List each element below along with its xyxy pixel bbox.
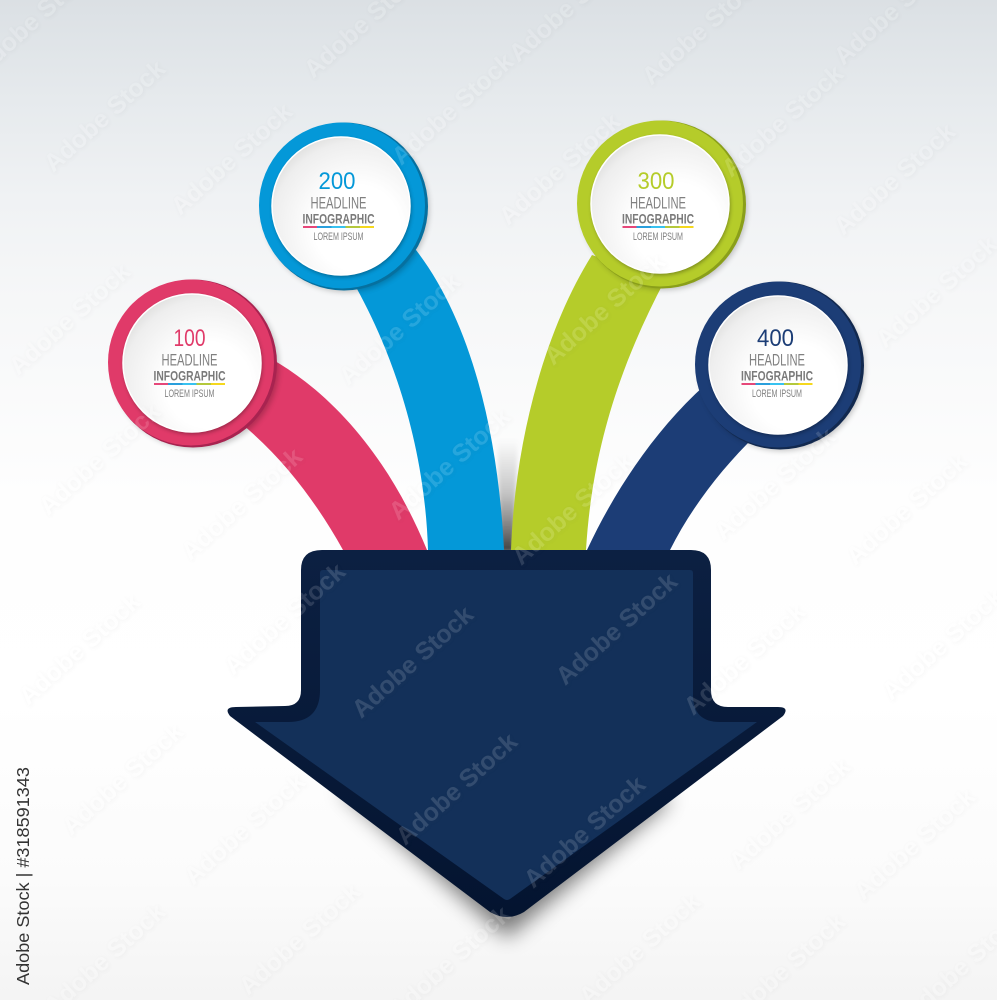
text: lorem ipsum: LOREM IPSUM — [164, 388, 214, 400]
watermarks: Adobe Stock — [551, 567, 683, 691]
watermarks: Adobe Stock — [39, 54, 171, 178]
text: 200: 200 — [318, 168, 356, 195]
watermarks: Adobe Stock — [841, 447, 973, 571]
watermarks: Adobe Stock — [494, 107, 626, 231]
watermarks: Adobe Stock — [4, 257, 136, 381]
watermarks: Adobe Stock — [519, 770, 651, 894]
rainbow rule — [154, 383, 225, 385]
arrow shadow — [340, 770, 672, 938]
text: headline: HEADLINE — [630, 194, 686, 212]
watermarks: Adobe Stock — [724, 752, 856, 876]
text: infographic: INFOGRAPHIC — [154, 368, 226, 384]
circle: navy — [695, 282, 865, 451]
watermarks: Adobe Stock — [717, 59, 849, 183]
text: infographic: INFOGRAPHIC — [741, 368, 813, 384]
watermarks: Adobe Stock — [179, 767, 311, 891]
text: headline: HEADLINE — [310, 194, 366, 212]
shadow between bands — [497, 440, 518, 552]
watermarks: Adobe Stock — [539, 247, 671, 371]
watermarks: Adobe Stock — [219, 557, 351, 681]
watermarks: Adobe Stock — [391, 727, 523, 851]
text: headline: HEADLINE — [749, 350, 805, 370]
text: infographic: INFOGRAPHIC — [302, 210, 374, 226]
watermarks: Adobe Stock — [507, 447, 639, 571]
band: pink — [243, 358, 427, 550]
watermarks: Adobe Stock — [849, 782, 981, 906]
circle: green — [577, 120, 747, 290]
text: infographic: INFOGRAPHIC — [622, 210, 694, 226]
watermarks: Adobe Stock — [34, 397, 166, 521]
circle: pink — [108, 280, 279, 449]
circle: blue — [259, 122, 429, 292]
band: blue — [352, 250, 504, 550]
watermarks: Adobe Stock — [166, 97, 298, 221]
text: headline: HEADLINE — [162, 350, 218, 370]
text: 100: 100 — [174, 325, 206, 352]
watermarks: Adobe Stock — [709, 422, 841, 546]
band: green — [511, 255, 665, 550]
watermarks: Adobe Stock — [829, 117, 961, 241]
text: lorem ipsum: LOREM IPSUM — [633, 231, 683, 243]
text: 400: 400 — [757, 325, 794, 352]
watermarks: Adobe Stock — [387, 47, 519, 171]
watermarks: Adobe Stock — [57, 717, 189, 841]
text: lorem ipsum: LOREM IPSUM — [752, 388, 802, 400]
text: lorem ipsum: LOREM IPSUM — [314, 231, 364, 243]
rainbow rule — [622, 226, 694, 228]
band: navy — [587, 385, 756, 550]
watermarks: Adobe Stock — [679, 597, 811, 721]
stock id caption: Adobe Stock | #318591343 — [13, 767, 33, 985]
rainbow rule — [303, 226, 374, 228]
watermarks: Adobe Stock — [14, 587, 146, 711]
watermarks: Adobe Stock — [384, 402, 516, 526]
rainbow rule — [742, 383, 812, 385]
watermarks: Adobe Stock — [334, 267, 466, 391]
watermarks: Adobe Stock — [234, 877, 366, 1000]
watermarks: Adobe Stock — [176, 442, 308, 566]
text: 300: 300 — [638, 168, 674, 195]
big arrow — [228, 550, 786, 917]
watermarks: Adobe Stock — [347, 600, 479, 724]
